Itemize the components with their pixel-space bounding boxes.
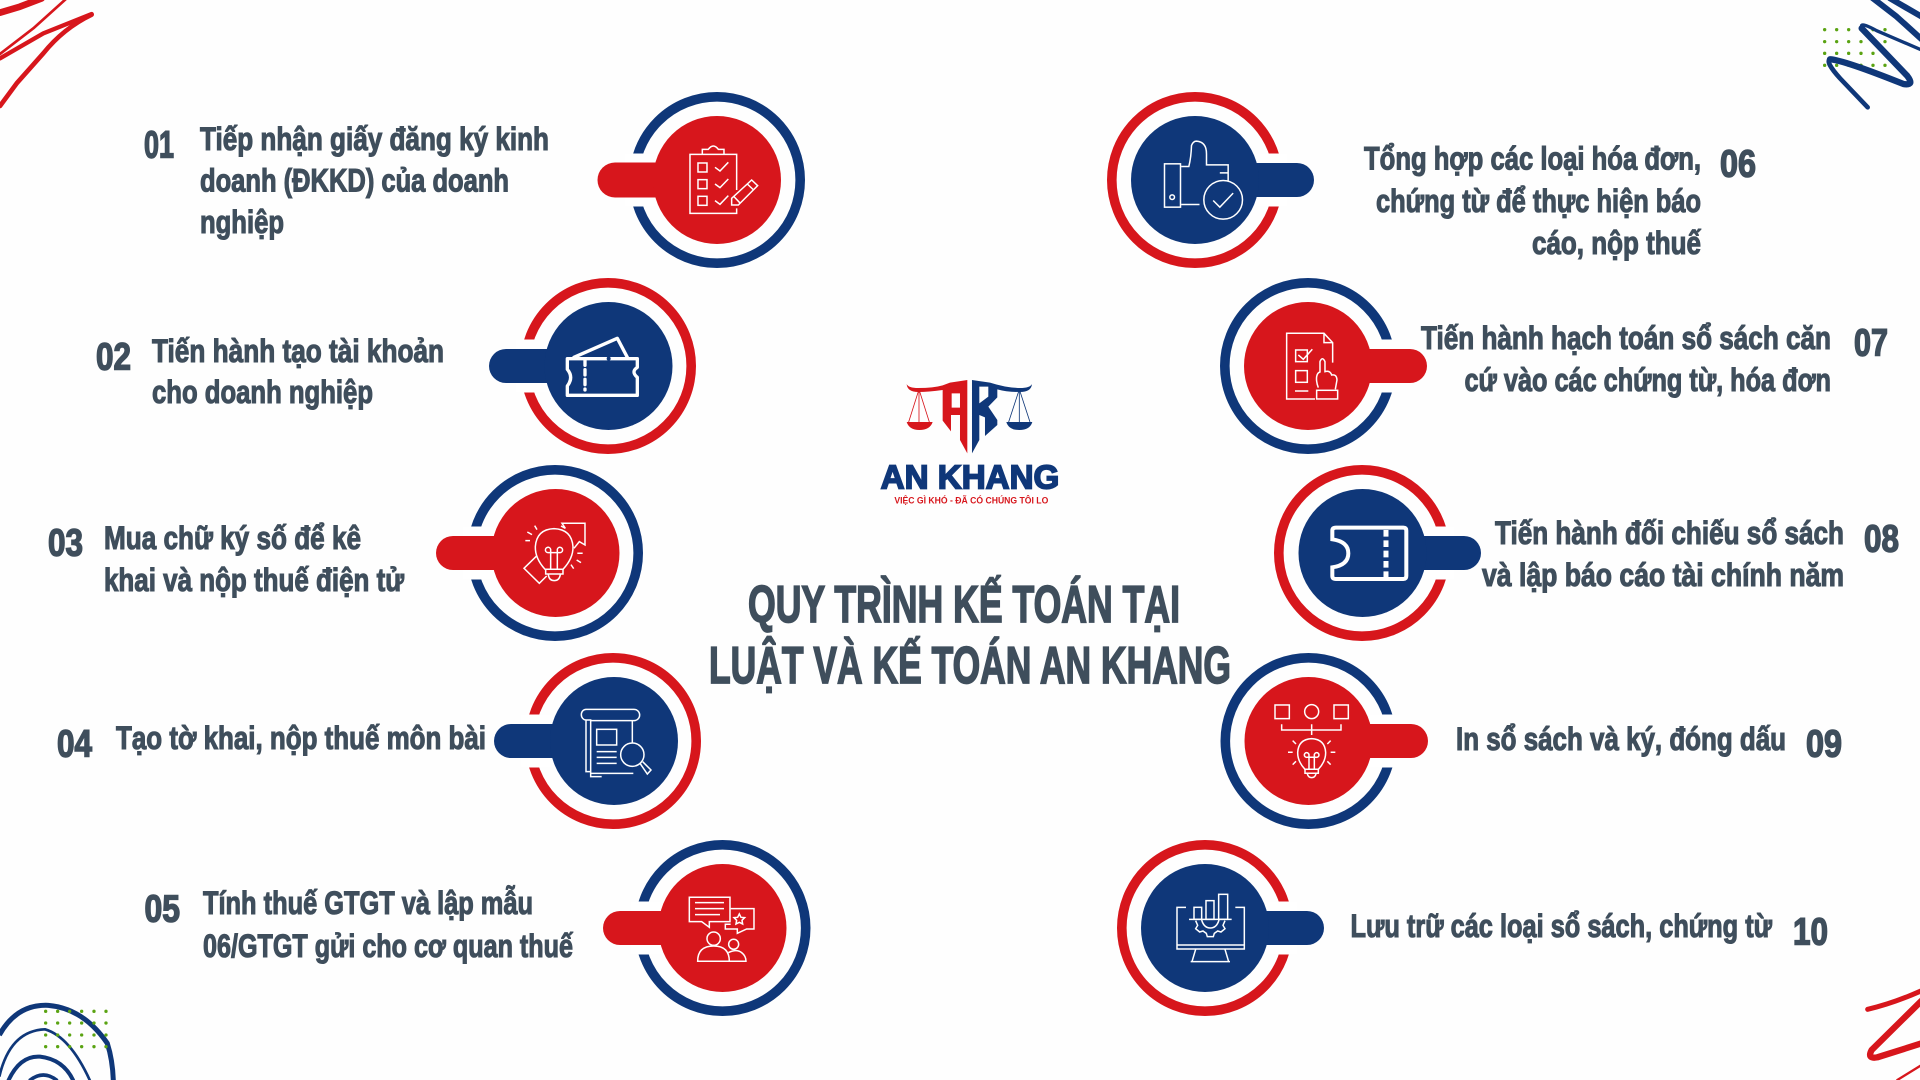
step 01 text: Tiếp nhận giấy đăng ký kinh bbox=[200, 121, 549, 157]
logo wordmark: AN KHANG bbox=[881, 459, 1059, 496]
step 09 badge bbox=[1225, 658, 1428, 824]
logo: An Khang bbox=[881, 380, 1059, 506]
icon: tickets bbox=[567, 338, 637, 395]
icon: monitor with chart and gear bbox=[1177, 894, 1244, 962]
step 05 text: Tính thuế GTGT và lập mẫu bbox=[203, 885, 533, 921]
step 07 text: Tiến hành hạch toán sổ sách căn bbox=[1421, 320, 1831, 356]
step 09 bbox=[1225, 658, 1842, 824]
step 06 bbox=[1112, 97, 1756, 263]
step 01 text bbox=[200, 121, 549, 240]
step 03 number: 03 bbox=[48, 522, 83, 564]
step 04 number: 04 bbox=[57, 724, 92, 766]
step 10 bbox=[1122, 845, 1828, 1011]
step 09 number: 09 bbox=[1806, 724, 1842, 766]
step 01 bbox=[144, 97, 800, 263]
step 05 bbox=[144, 845, 806, 1011]
step 01 badge bbox=[598, 97, 800, 263]
step 04 bbox=[57, 658, 696, 824]
step 10 text: Lưu trữ các loại sổ sách, chứng từ bbox=[1350, 908, 1773, 944]
step 02 text: Tiến hành tạo tài khoản bbox=[152, 333, 444, 369]
step 01 text: nghiệp bbox=[200, 204, 284, 240]
step 06 text bbox=[1364, 140, 1701, 261]
step 07 badge bbox=[1225, 283, 1427, 449]
icon: ticket bbox=[1332, 528, 1406, 579]
title: QUY TRÌNH KẾ TOÁN TẠI bbox=[748, 575, 1180, 634]
step 01 number: 01 bbox=[144, 124, 174, 166]
step 08 text bbox=[1482, 515, 1844, 593]
step 06 text: chứng từ để thực hiện báo bbox=[1376, 183, 1701, 219]
step 10 badge bbox=[1122, 845, 1324, 1011]
step 08 badge bbox=[1279, 470, 1481, 636]
step 03 text bbox=[104, 520, 405, 598]
step 05 badge bbox=[603, 845, 806, 1011]
step 02 text bbox=[152, 333, 444, 410]
step 07 number: 07 bbox=[1854, 322, 1888, 364]
step 06 text: Tổng hợp các loại hóa đơn, bbox=[1364, 140, 1701, 176]
logo emblem: scales and AK monogram bbox=[907, 380, 1032, 453]
step 05 text bbox=[203, 885, 573, 964]
decoration: bottom-right red scribble bbox=[1868, 991, 1920, 1080]
step 03 text: Mua chữ ký số để kê bbox=[104, 520, 361, 556]
step 07 text: cứ vào các chứng từ, hóa đơn bbox=[1464, 362, 1831, 398]
step 08 bbox=[1279, 470, 1899, 636]
step 03 text: khai và nộp thuế điện tử bbox=[104, 562, 405, 598]
step 03 bbox=[48, 470, 638, 636]
title bbox=[709, 575, 1231, 695]
decoration: top-right navy scribble with green dots bbox=[1823, 0, 1920, 107]
icon: form with pointing hand bbox=[1287, 333, 1338, 399]
step 08 text: Tiến hành đối chiếu sổ sách bbox=[1495, 515, 1844, 551]
decoration: bottom-left navy arcs with green dots bbox=[0, 1005, 113, 1080]
step 02 number: 02 bbox=[96, 336, 131, 378]
logo tagline: VIỆC GÌ KHÓ - ĐÃ CÓ CHÚNG TÔI LO bbox=[894, 495, 1048, 506]
step 06 text: cáo, nộp thuế bbox=[1532, 225, 1701, 261]
step 01 text: doanh (ĐKKD) của doanh bbox=[200, 162, 509, 198]
icon: checklist with pencil bbox=[690, 146, 758, 213]
icon: document with magnifier bbox=[581, 709, 651, 777]
step 06 number: 06 bbox=[1720, 144, 1756, 186]
step 02 badge bbox=[489, 283, 691, 449]
step 08 number: 08 bbox=[1864, 518, 1899, 560]
step 02 text: cho doanh nghiệp bbox=[152, 374, 373, 410]
step 07 text bbox=[1421, 320, 1831, 398]
step 08 text: và lập báo cáo tài chính năm bbox=[1482, 557, 1844, 593]
step 03 badge bbox=[436, 470, 638, 636]
decoration: top-left red scribble bbox=[0, 0, 92, 106]
step 04 text: Tạo tờ khai, nộp thuế môn bài bbox=[116, 720, 486, 756]
step 07 bbox=[1225, 283, 1888, 449]
icon: lightbulb and arrow bbox=[524, 523, 585, 583]
step 05 text: 06/GTGT gửi cho cơ quan thuế bbox=[203, 928, 573, 964]
step 10 number: 10 bbox=[1793, 912, 1828, 954]
step 02 bbox=[96, 283, 691, 449]
title: LUẬT VÀ KẾ TOÁN AN KHANG bbox=[709, 636, 1231, 695]
icon: diagram with lightbulb bbox=[1275, 705, 1348, 778]
step 05 number: 05 bbox=[144, 888, 180, 930]
step 09 text: In sổ sách và ký, đóng dấu bbox=[1456, 721, 1786, 757]
step 06 badge bbox=[1112, 97, 1314, 263]
icon: thumbs up with check bbox=[1164, 141, 1242, 219]
step 04 badge bbox=[494, 658, 696, 824]
icon: speech bubbles and people bbox=[689, 897, 754, 961]
